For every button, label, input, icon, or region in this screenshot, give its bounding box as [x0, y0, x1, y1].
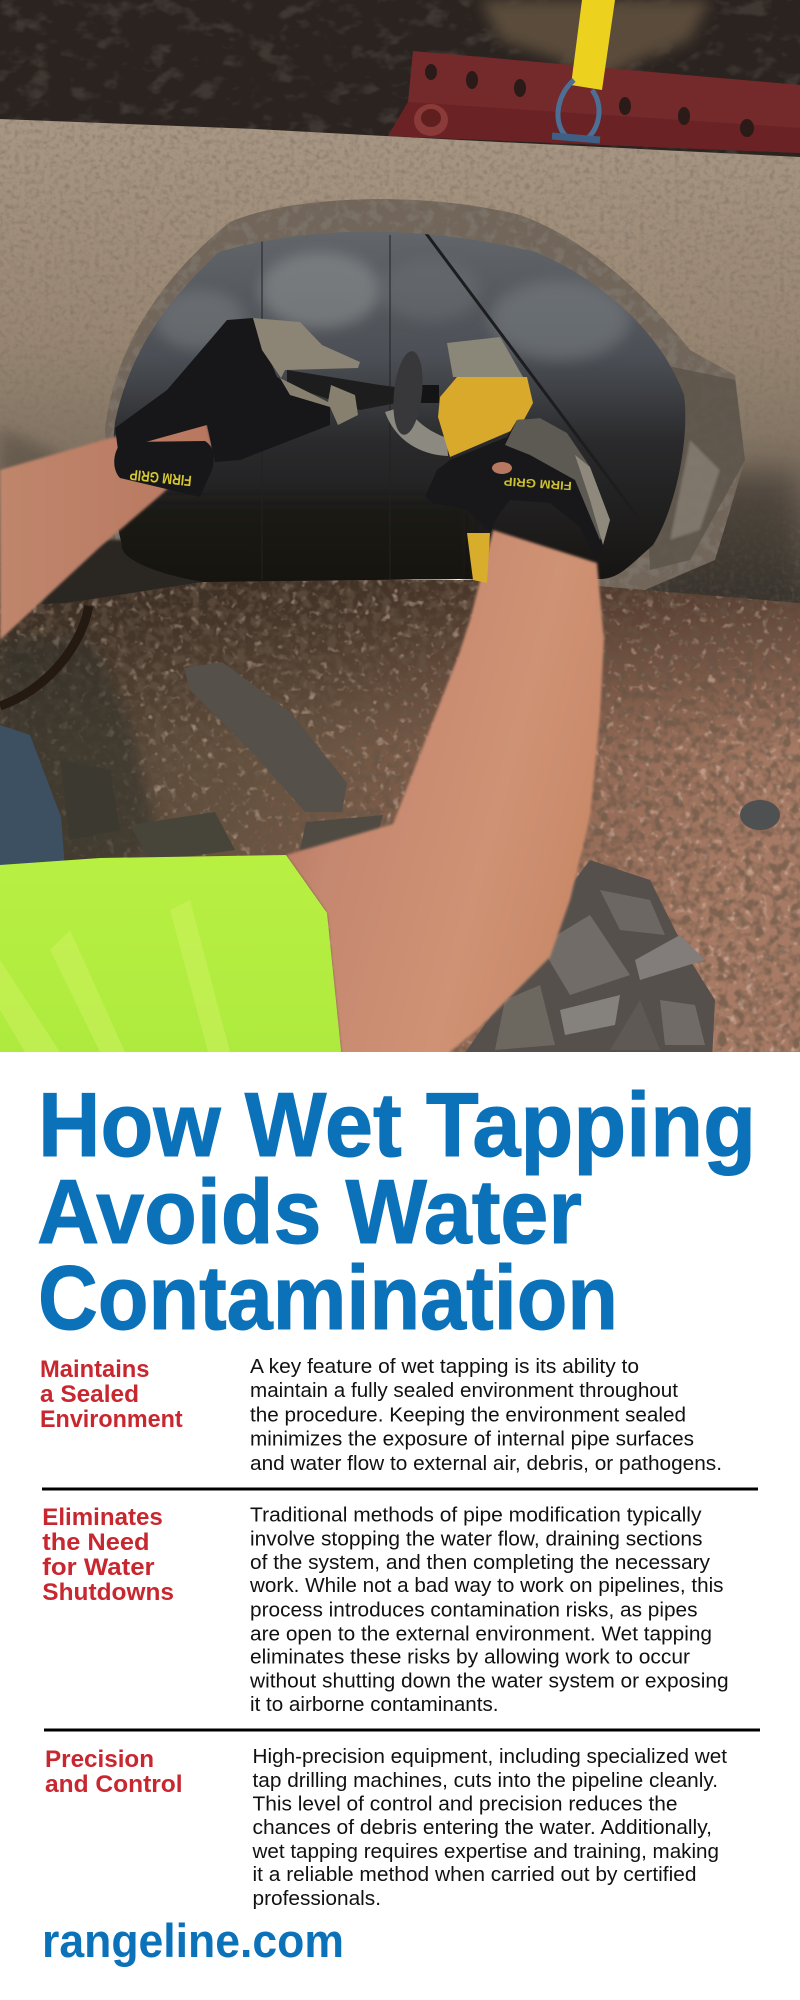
- panel: precision and control: [45, 1746, 727, 1910]
- body text: tap drilling machines, cuts into the pipeline cleanly.: [252, 1770, 718, 1792]
- body text: eliminates these risks by allowing work to occur: [250, 1646, 690, 1668]
- title: Contamination: [38, 1248, 618, 1349]
- body text: and water flow to external air, debris, or pathogens.: [250, 1453, 722, 1475]
- body text: minimizes the exposure of internal pipe surfaces: [250, 1428, 694, 1450]
- trench wall background: [0, 0, 800, 157]
- photo: worker cutting into a pipe: [0, 0, 800, 1060]
- body text: work. While not a bad way to work on pipelines, this: [249, 1575, 724, 1597]
- heading: Precision: [45, 1747, 154, 1773]
- heading: the Need: [42, 1530, 149, 1556]
- body text: it to airborne contaminants.: [250, 1694, 498, 1716]
- brand text on glove strap: FIRM GRIP: [503, 474, 572, 493]
- body text: [250, 1356, 722, 1475]
- divider: [44, 1728, 760, 1732]
- body text: Traditional methods of pipe modification typically: [250, 1504, 702, 1526]
- lifting beam: [388, 51, 800, 153]
- grinder guard: [385, 405, 448, 456]
- concrete pipe: [0, 110, 800, 610]
- heading: Maintains: [40, 1357, 150, 1383]
- body text: of the system, and then completing the necessary: [250, 1552, 710, 1574]
- stone slab on gravel: [184, 662, 347, 812]
- left glove: [114, 318, 360, 497]
- grinder yellow body: [438, 377, 533, 457]
- body text: involve stopping the water flow, draining sections: [250, 1528, 702, 1550]
- body text: wet tapping requires expertise and training, making: [251, 1841, 719, 1863]
- heading: Environment: [40, 1407, 183, 1433]
- body text: High-precision equipment, including specialized wet: [252, 1746, 727, 1768]
- right glove: [426, 418, 610, 545]
- body text: the procedure. Keeping the environment sealed: [250, 1404, 686, 1426]
- glove finger: [280, 378, 358, 425]
- title: Avoids Water: [37, 1162, 582, 1263]
- title: [37, 1075, 756, 1349]
- website footer: rangeline.com: [42, 1914, 344, 1967]
- body text: professionals.: [252, 1888, 381, 1910]
- grinder lower handle: [467, 533, 490, 583]
- shackle: [552, 80, 600, 140]
- worker jeans: [0, 725, 64, 865]
- body text: This level of control and precision reduces the: [252, 1794, 678, 1816]
- yellow lifting strap: [571, 0, 615, 90]
- body text: maintain a fully sealed environment throughout: [250, 1380, 678, 1402]
- wrist hole: [492, 462, 512, 474]
- heading: Shutdowns: [42, 1580, 174, 1606]
- angle grinder: [287, 337, 533, 583]
- heading: [40, 1357, 183, 1433]
- panel: maintains a sealed environment: [40, 1356, 722, 1475]
- grey patches beside arm: [62, 767, 383, 858]
- handle guard disc: [394, 351, 422, 435]
- body text: without shutting down the water system or exposing: [249, 1670, 729, 1692]
- body text: process introduces contamination risks, as pipes: [250, 1600, 698, 1622]
- divider: [42, 1488, 758, 1490]
- worker right arm: [286, 530, 604, 1060]
- body text: [249, 1504, 729, 1716]
- body text: [251, 1746, 727, 1910]
- brand text on strap: FIRM GRIP: [129, 466, 192, 489]
- heading: Eliminates: [42, 1505, 163, 1531]
- heading: [42, 1505, 174, 1606]
- body text: chances of debris entering the water. Additionally,: [252, 1817, 712, 1839]
- heading: [45, 1747, 183, 1798]
- heading: for Water: [42, 1555, 155, 1581]
- body text: A key feature of wet tapping is its ability to: [250, 1356, 639, 1378]
- dark rocks pile: [460, 860, 715, 1060]
- grinder top housing: [447, 337, 523, 377]
- body text: are open to the external environment. Wet tapping: [250, 1624, 712, 1646]
- grinder shaft: [420, 385, 439, 403]
- neon green shirt sleeve: [0, 855, 342, 1060]
- small grey stone: [740, 800, 780, 830]
- heading: a Sealed: [40, 1382, 139, 1408]
- strap on the ground: [0, 606, 89, 706]
- heading: and Control: [45, 1772, 183, 1798]
- glove wrist strap: [114, 441, 214, 497]
- panel: eliminates the need for water shutdowns: [42, 1504, 729, 1716]
- glove thumb: [253, 318, 360, 378]
- worker left arm: [0, 412, 212, 640]
- exposed rubber liner in the pipe opening: [90, 232, 685, 590]
- gravel ground: [0, 580, 800, 1060]
- side handle: [287, 370, 402, 410]
- body text: it a reliable method when carried out by certified: [252, 1864, 696, 1886]
- title: How Wet Tapping: [38, 1075, 756, 1176]
- broken concrete rim: [105, 199, 745, 592]
